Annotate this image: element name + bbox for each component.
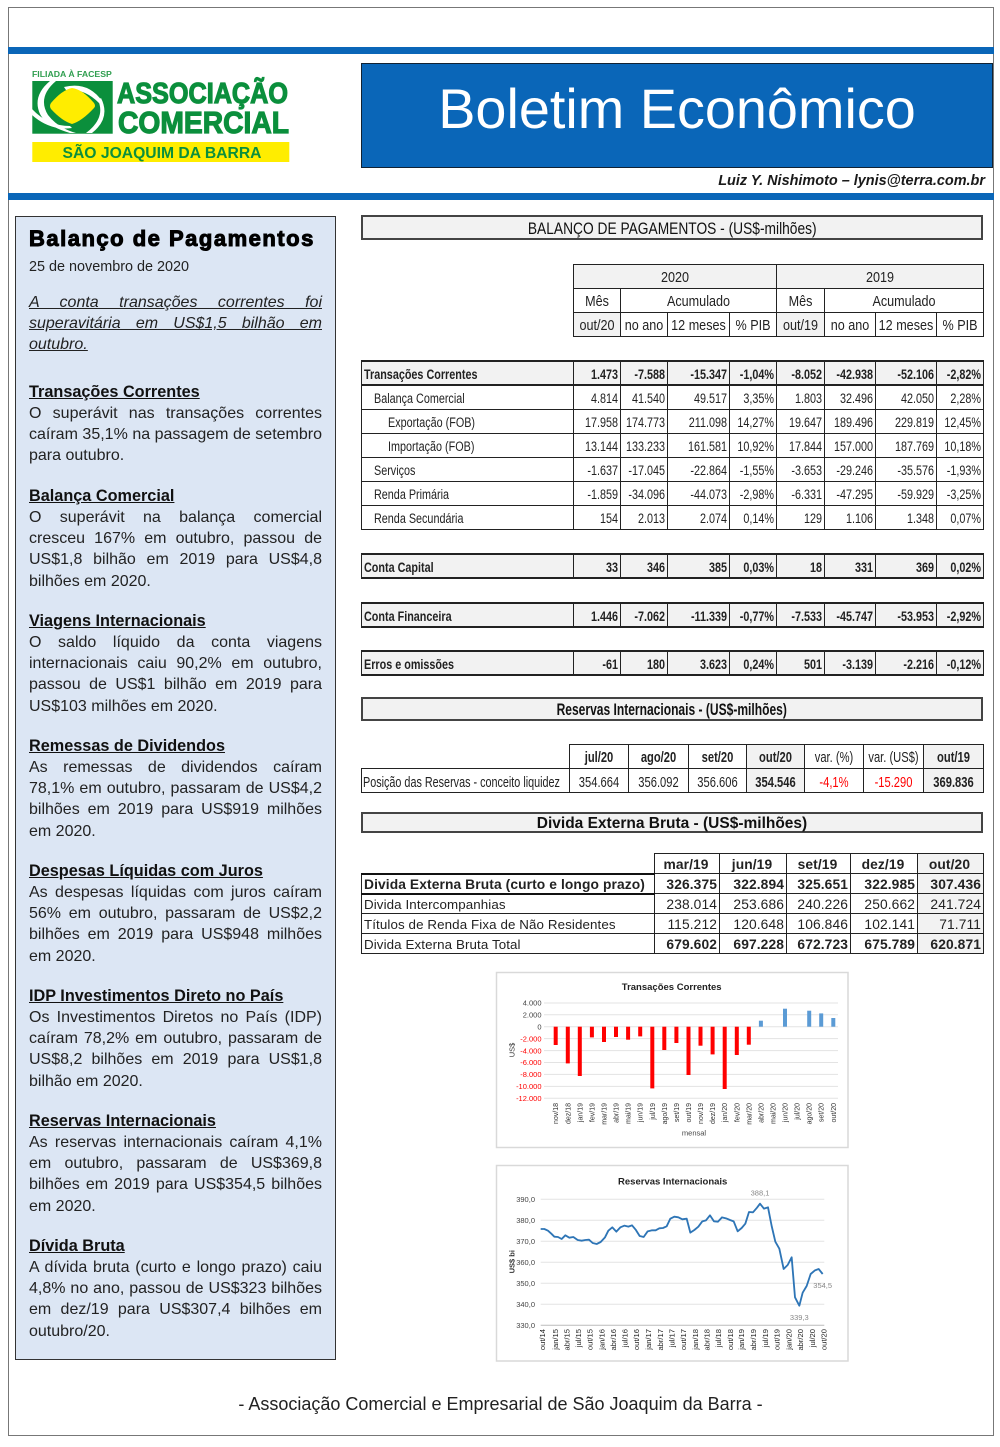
table: Posição das Reservas: 356.092 [638,774,679,790]
table: Dívida Externa Bruta [361,853,984,954]
chart: Reservas Internacionais: 380,0 [516,1216,535,1225]
section: Balança Comercial [29,486,322,590]
table row: Erros e omissões: Erros e omissões [364,657,454,672]
lead text: outubro. [29,336,88,353]
table: Dívida Externa Bruta: 307.436 [930,877,981,892]
table: Dívida Externa Bruta: 250.662 [864,897,915,912]
chart: Reservas Internacionais: 360,0 [516,1258,535,1267]
table row: Conta Financeira: -7.062 [634,609,665,624]
chart: Reservas Internacionais: 388,1 [751,1188,769,1198]
table: Transações Correntes: -42.938 [836,367,873,382]
footer: - Associação Comercial e Empresarial de São Joaquim da Barra - [238,1394,763,1414]
chart: Transações Correntes: -4.000 [520,1046,542,1055]
section: Reservas Internacionais: em 2020. [29,1198,96,1215]
table: Posição das Reservas: -15.290 [875,774,912,790]
table: Dívida Externa Bruta: mar/19 [663,857,709,872]
chart: Reservas Internacionais: 354,5 [813,1281,832,1290]
table: Transações Correntes [361,360,984,530]
chart: Transações Correntes: 2.000 [523,1010,542,1020]
table: Transações Correntes: Renda Secundária [374,510,463,526]
author line: Luiz Y. Nishimoto – lynis@terra.com.br [718,173,985,189]
table: Posição das Reservas: 356.606 [697,774,738,790]
section: Balança Comercial: O superávit na balança comercial [29,509,322,526]
table: Dívida Externa Bruta: 106.846 [797,917,848,932]
table header: 2020 and 2019 periods: 12 meses [671,317,726,334]
table: Transações Correntes: -3.653 [791,462,822,478]
chart: Transações Correntes: out/20 [831,1103,838,1122]
chart: Reservas Internacionais: out/17 [679,1329,688,1350]
table: Transações Correntes: -2,98% [740,486,774,502]
table: Transações Correntes: 133.233 [626,438,665,454]
section: Dívida Bruta: em dez/19 para US$307,4 bilhões em [29,1301,322,1318]
section: Transações Correntes: para outubro. [29,447,124,464]
table: Posição das Reservas: 354.664 [579,774,619,790]
table: Transações Correntes: -6.331 [791,486,822,502]
table: Transações Correntes: -2,82% [947,367,981,382]
section: Transações Correntes [29,382,322,464]
table: Transações Correntes: 157.000 [834,438,873,454]
table row: Erros e omissões: 180 [647,657,665,672]
table: Dívida Externa Bruta: 241.724 [930,897,981,912]
table: Transações Correntes: 32.496 [840,390,873,406]
table: Transações Correntes: 229.819 [895,414,934,430]
table header: 2020 and 2019 periods: Acumulado [667,293,730,310]
section: Reservas Internacionais [29,1112,322,1215]
table: Transações Correntes: -7.588 [634,367,665,382]
chart: Transações Correntes: ago/20 [807,1103,814,1124]
table: Transações Correntes: -1,55% [740,462,774,478]
section: Remessas de Dividendos: As remessas de dividendos caíram [29,759,322,776]
section: Transações Correntes: caíram 35,1% na passagem de setembro [29,426,322,443]
table row: Conta Financeira: -7.533 [791,609,822,624]
table: Transações Correntes: 42.050 [901,390,934,406]
table row: Conta Capital: 0,02% [950,560,981,575]
table row: Erros e omissões: 501 [804,657,822,672]
chart: Reservas Internacionais: 340,0 [516,1300,535,1309]
section: Despesas Líquidas com Juros: 56% em outubro, passaram de US$2,2 [29,905,322,922]
chart: Reservas Internacionais: jan/18 [691,1329,700,1351]
logo: Associação Comercial: FILIADA À FACESP [32,69,112,79]
date: 25 de novembro de 2020 [29,259,189,275]
chart: Transações Correntes: -10.000 [516,1082,542,1091]
table: Dívida Externa Bruta: jun/19 [732,857,772,872]
title banner: Boletim Econômico [438,77,916,140]
chart: Reservas Internacionais: abr/17 [656,1329,665,1351]
table header: 2020 and 2019 periods [573,264,984,337]
table: Transações Correntes: -17.045 [628,462,665,478]
table row: Conta Capital: 331 [855,560,873,575]
table: Posição das Reservas: set/20 [702,750,733,766]
table: Posição das Reservas: var. (%) [815,750,853,766]
table: Dívida Externa Bruta: 620.871 [930,937,981,952]
table: Transações Correntes: -52.106 [897,367,934,382]
table: Transações Correntes: Balança Comercial [374,390,465,406]
table: Transações Correntes: 2.013 [638,510,665,526]
table row: Erros e omissões: 3.623 [700,657,727,672]
table: Dívida Externa Bruta: 679.602 [666,937,717,952]
section: Viagens Internacionais: passou de US$1 bilhão em 2019 para [29,676,322,693]
table: Transações Correntes: 10,18% [944,438,981,454]
chart: Reservas Internacionais: abr/18 [702,1329,712,1351]
table: Posição das Reservas: Posição das Reservas - conceito liquidez [363,774,560,790]
chart: Transações Correntes: US$ [508,1042,516,1057]
heading: Dívida Externa Bruta table: Divida Externa Bruta - (US$-milhões) [537,815,807,832]
table: Transações Correntes: 4.814 [591,390,618,406]
table: Transações Correntes: 17.844 [789,438,822,454]
chart: Transações Correntes: abr/19 [614,1103,620,1123]
section: Balança Comercial: US$1,8 bilhão em 2019 para US$4,8 [29,551,322,568]
chart: Reservas Internacionais: US$ bi [508,1250,516,1273]
chart: Transações Correntes: mai/19 [626,1103,633,1124]
table header: 2020 and 2019 periods: 2019 [866,269,894,286]
table row: Conta Capital [361,553,984,579]
chart: Transações Correntes: mar/20 [746,1103,753,1125]
heading: Reservas Internacionais table [361,697,983,721]
section: Viagens Internacionais: Viagens Internacionais [29,612,206,630]
table: Transações Correntes: -1,04% [740,367,774,382]
table: Transações Correntes: 41.540 [632,390,665,406]
chart: Transações Correntes: 4.000 [523,999,542,1008]
table: Transações Correntes: 161.581 [688,438,727,454]
section: Reservas Internacionais: bilhões em 2019 para US$354,5 bilhões [29,1176,322,1193]
chart: Transações Correntes: jul/19 [650,1103,657,1121]
heading: Balanço de Pagamentos table: BALANÇO DE PAGAMENTOS - (US$-milhões) [528,219,816,238]
table: Transações Correntes: 0,07% [950,510,981,526]
table: Dívida Externa Bruta: 322.894 [733,877,784,892]
table row: Conta Capital: Conta Capital [364,560,434,575]
section: IDP Investimentos Direto no País: bilhão em 2020. [29,1073,143,1090]
chart: Transações Correntes: out/19 [686,1103,693,1122]
table: Transações Correntes: -22.864 [690,462,727,478]
table: Dívida Externa Bruta: 322.985 [864,877,915,892]
chart: Reservas Internacionais: out/15 [586,1329,594,1350]
section: IDP Investimentos Direto no País: caíram 78,2% em outubro, passaram de [29,1030,322,1047]
table: Transações Correntes: 19.647 [789,414,822,430]
table: Posição das Reservas [361,744,984,793]
section: Dívida Bruta: 4,8% no ano, passou de US$323 bilhões [29,1280,322,1297]
table: Posição das Reservas: -4,1% [819,774,849,790]
section: Reservas Internacionais: As reservas internacionais caíram 4,1% [29,1134,322,1151]
table: Transações Correntes: -8.052 [791,367,822,382]
table row: Conta Financeira: Conta Financeira [364,609,452,624]
table header: 2020 and 2019 periods: 2020 [661,269,689,286]
table: Dívida Externa Bruta: 102.141 [864,917,915,932]
chart: Transações Correntes: abr/20 [758,1103,765,1123]
chart: Transações Correntes: jan/20 [722,1103,729,1123]
table: Transações Correntes: Serviços [374,462,415,478]
table: Transações Correntes: 189.496 [834,414,873,430]
table: Posição das Reservas: jul/20 [585,750,613,766]
section: Transações Correntes: O superávit nas transações correntes [29,405,322,422]
table: Transações Correntes: 0,14% [743,510,774,526]
chart: Reservas Internacionais: jan/15 [551,1329,560,1351]
chart: Reservas Internacionais: out/18 [726,1329,735,1350]
section: IDP Investimentos Direto no País: US$8,2 bilhões em 2019 para US$1,8 [29,1051,322,1068]
table: Transações Correntes: 1.803 [795,390,822,406]
table header: 2020 and 2019 periods: out/19 [783,317,818,334]
table: Transações Correntes: 174.773 [626,414,665,430]
chart: Reservas Internacionais: jul/17 [668,1329,676,1348]
table: Posição das Reservas: out/20 [759,750,792,766]
section: Remessas de Dividendos: Remessas de Dividendos [29,736,225,754]
table: Transações Correntes: 14,27% [737,414,774,430]
table: Transações Correntes: 13.144 [585,438,618,454]
table row: Erros e omissões: -2.216 [903,657,934,672]
chart: Transações Correntes: nov/18 [553,1103,560,1124]
chart: Transações Correntes: -12.000 [516,1094,542,1103]
table: Posição das Reservas: out/19 [937,750,970,766]
table: Transações Correntes: 2,28% [950,390,981,406]
chart: Transações Correntes: jun/19 [638,1103,645,1123]
table: Dívida Externa Bruta: 71.711 [939,917,981,932]
section: IDP Investimentos Direto no País [29,986,322,1090]
table header: 2020 and 2019 periods: 12 meses [879,317,933,334]
chart: Reservas Internacionais: out/14 [538,1329,547,1350]
table: Dívida Externa Bruta: Divida Externa Bruta Total [364,937,521,952]
table row: Conta Capital: 33 [606,560,618,575]
chart: Reservas Internacionais: out/16 [632,1329,641,1350]
chart: Transações Correntes [496,972,848,1148]
table: Transações Correntes: 1.348 [907,510,934,526]
chart: Transações Correntes: ago/19 [662,1103,669,1124]
table: Transações Correntes: Renda Primária [374,486,449,502]
header bottom blue bar [8,193,994,200]
heading: Balanço de Pagamentos table [361,215,983,240]
title banner [361,63,993,168]
panel heading: Balanço de Pagamentos [29,226,315,251]
chart: Reservas Internacionais: jul/16 [620,1329,630,1348]
chart: Transações Correntes: mai/20 [770,1103,778,1124]
logo: Associação Comercial [32,69,290,162]
section: Dívida Bruta: outubro/20. [29,1323,110,1340]
chart: Reservas Internacionais: jul/18 [714,1329,723,1348]
section: Reservas Internacionais: em outubro, passaram de US$369,8 [29,1155,322,1172]
table: Dívida Externa Bruta: out/20 [929,857,970,872]
table row: Conta Financeira: -53.953 [897,609,934,624]
table: Dívida Externa Bruta: 120.648 [733,917,784,932]
lead text: superavitária em US$1,5 bilhão em [29,315,322,332]
table: Transações Correntes: Transações Correntes [364,367,477,382]
chart: Reservas Internacionais: abr/16 [609,1329,618,1351]
table row: Conta Financeira: 1.446 [591,609,618,624]
chart: Reservas Internacionais: jan/20 [784,1329,794,1351]
chart: Reservas Internacionais: 350,0 [516,1279,535,1288]
chart: Transações Correntes: jan/19 [577,1103,584,1123]
section: Viagens Internacionais [29,612,322,715]
table: Dívida Externa Bruta: 675.789 [864,937,915,952]
table header: 2020 and 2019 periods: Acumulado [872,293,936,310]
lead text: A conta transações correntes foi [29,294,322,310]
section: Dívida Bruta: A dívida bruta (curto e longo prazo) caiu [29,1259,322,1276]
table row: Erros e omissões: -0,12% [947,657,981,672]
table: Dívida Externa Bruta: 697.228 [733,937,784,952]
table header: 2020 and 2019 periods: % PIB [942,317,978,334]
table: Dívida Externa Bruta: Títulos de Renda Fixa de Não Residentes [364,917,616,932]
section: Dívida Bruta: Dívida Bruta [29,1236,125,1254]
chart: Reservas Internacionais: 339,3 [790,1313,809,1322]
chart: Reservas Internacionais: jul/15 [574,1329,583,1348]
section: Balança Comercial: cresceu 167% em outubro, passou de [29,530,322,547]
section: Reservas Internacionais: Reservas Internacionais [29,1112,216,1130]
chart: Reservas Internacionais [496,1166,848,1361]
lead text [28,294,322,353]
table: Transações Correntes: -1.637 [587,462,618,478]
panel: Balanço de Pagamentos text column [15,216,336,1360]
chart: Reservas Internacionais: Reservas Internacionais [618,1176,727,1188]
section: Dívida Bruta [29,1236,322,1340]
chart: Transações Correntes: 0 [537,1022,542,1031]
table: Dívida Externa Bruta: 326.375 [666,877,717,892]
section: Remessas de Dividendos: 78,1% em outubro, passaram de US$4,2 [29,780,322,797]
chart: Reservas Internacionais: abr/15 [562,1329,572,1351]
chart: Reservas Internacionais: jul/19 [761,1329,770,1348]
chart: Transações Correntes: jun/20 [782,1103,790,1123]
chart: Reservas Internacionais: abr/19 [749,1329,758,1351]
table: Dívida Externa Bruta: Divida Intercompanhias [364,897,506,912]
table row: Conta Financeira [361,602,984,628]
header top blue bar [8,47,994,54]
chart: Reservas Internacionais: 370,0 [516,1237,535,1246]
table: Transações Correntes: 12,45% [944,414,981,430]
section: Despesas Líquidas com Juros [29,862,322,965]
table: Posição das Reservas: var. (US$) [868,750,919,766]
table: Posição das Reservas: ago/20 [641,750,676,766]
table header: 2020 and 2019 periods: no ano [831,317,869,334]
chart: Reservas Internacionais: out/20 [820,1329,828,1350]
chart: Reservas Internacionais: jan/16 [598,1329,606,1351]
table row: Conta Financeira: -2,92% [947,609,981,624]
chart: Reservas Internacionais: 330,0 [516,1321,535,1330]
table header: 2020 and 2019 periods: % PIB [735,317,771,334]
section: IDP Investimentos Direto no País: IDP Investimentos Direto no País [29,986,283,1004]
table row: Conta Financeira: -0,77% [740,609,774,624]
section: Transações Correntes: Transações Correntes [29,382,200,400]
table: Transações Correntes: 154 [600,510,618,526]
section: Viagens Internacionais: internacionais caiu 90,2% em outubro, [29,655,322,672]
table row: Conta Capital: 0,03% [743,560,774,575]
heading: Dívida Externa Bruta table [361,812,983,833]
table: Transações Correntes: -15.347 [690,367,727,382]
chart: Transações Correntes: jul/20 [795,1103,802,1121]
section: Despesas Líquidas com Juros: em 2020. [29,948,96,965]
chart: Transações Correntes: mensal [682,1128,706,1138]
table: Transações Correntes: 3,35% [743,390,774,406]
section: Balança Comercial: Balança Comercial [29,486,174,504]
chart: Reservas Internacionais: abr/20 [796,1329,805,1351]
table: Transações Correntes: -34.096 [628,486,665,502]
table row: Conta Capital: 385 [709,560,727,575]
chart: Transações Correntes: fev/20 [734,1103,741,1122]
table header: 2020 and 2019 periods: no ano [625,317,663,334]
table: Transações Correntes: 187.769 [895,438,934,454]
chart: Reservas Internacionais: jan/19 [737,1329,746,1351]
table: Transações Correntes: -1,93% [947,462,981,478]
table: Dívida Externa Bruta: 325.651 [797,877,848,892]
table: Transações Correntes: -3,25% [947,486,981,502]
table: Dívida Externa Bruta: 240.226 [797,897,848,912]
table: Transações Correntes: 49.517 [694,390,727,406]
table: Transações Correntes: -59.929 [897,486,934,502]
table: Transações Correntes: -35.576 [897,462,934,478]
section: Balança Comercial: bilhões em 2020. [29,573,151,590]
chart: Transações Correntes: set/20 [819,1103,826,1122]
table row: Conta Capital: 369 [916,560,934,575]
section: Remessas de Dividendos [29,736,322,840]
table: Transações Correntes: 2.074 [700,510,727,526]
table row: Erros e omissões: 0,24% [743,657,774,672]
table: Dívida Externa Bruta: Divida Externa Bruta (curto e longo prazo) [364,877,645,892]
table header: 2020 and 2019 periods: Mês [585,293,609,310]
section: Despesas Líquidas com Juros: As despesas líquidas com juros caíram [29,884,322,901]
table: Transações Correntes: -44.073 [690,486,727,502]
table: Transações Correntes: 17.958 [585,414,618,430]
section: Despesas Líquidas com Juros: bilhões em 2019 para US$948 milhões [29,926,322,943]
table: Transações Correntes: 129 [804,510,822,526]
chart: Transações Correntes: dez/18 [565,1103,572,1124]
table: Transações Correntes: 211.098 [689,414,727,430]
chart: Reservas Internacionais: jul/20 [808,1329,817,1348]
chart: Transações Correntes: mar/19 [602,1103,608,1125]
table header: 2020 and 2019 periods: Mês [789,293,812,310]
table row: Conta Financeira: -45.747 [836,609,873,624]
table: Dívida Externa Bruta: set/19 [798,857,837,872]
table: Transações Correntes: 1.106 [846,510,873,526]
table: Transações Correntes: Exportação (FOB) [388,414,475,430]
table row: Conta Capital: 346 [647,560,665,575]
chart: Transações Correntes: -6.000 [520,1058,542,1067]
table row: Erros e omissões: -61 [602,657,618,672]
heading: Reservas Internacionais table: Reservas Internacionais - (US$-milhões) [557,701,787,719]
chart: Reservas Internacionais: jan/17 [644,1329,653,1351]
chart: Transações Correntes: -2.000 [520,1034,542,1043]
table: Dívida Externa Bruta: 672.723 [797,937,848,952]
section: Despesas Líquidas com Juros: Despesas Líquidas com Juros [29,862,263,880]
table row: Erros e omissões [361,650,984,676]
section: IDP Investimentos Direto no País: Os Investimentos Diretos no País (IDP) [29,1009,322,1026]
table: Dívida Externa Bruta: 253.686 [733,897,784,912]
chart: Transações Correntes: -8.000 [520,1070,542,1079]
section: Remessas de Dividendos: em 2020. [29,823,96,840]
table: Posição das Reservas: 354.546 [755,774,796,790]
table: Dívida Externa Bruta: 115.212 [667,917,717,932]
table: Transações Correntes: Importação (FOB) [388,438,474,454]
table: Transações Correntes: 10,92% [737,438,774,454]
section: Viagens Internacionais: O saldo líquido da conta viagens [29,634,322,651]
table: Transações Correntes: -1.859 [587,486,618,502]
logo: Associação Comercial: SÃO JOAQUIM DA BARRA [62,144,262,162]
table: Transações Correntes: -47.295 [836,486,873,502]
chart: Transações Correntes: Transações Correntes [622,982,722,993]
section: Viagens Internacionais: US$103 milhões em 2020. [29,698,218,715]
table: Transações Correntes: 1.473 [591,367,618,382]
chart: Transações Correntes: set/19 [674,1103,681,1122]
table row: Erros e omissões: -3.139 [842,657,873,672]
table: Dívida Externa Bruta: dez/19 [862,857,904,872]
table header: 2020 and 2019 periods: out/20 [579,317,615,334]
chart: Transações Correntes: nov/19 [698,1103,705,1124]
table: Posição das Reservas: 369.836 [933,774,974,790]
table row: Conta Financeira: -11.339 [691,609,727,624]
chart: Reservas Internacionais: 390,0 [516,1195,535,1204]
table: Dívida Externa Bruta: 238.014 [666,897,717,912]
section: Remessas de Dividendos: bilhões em 2019 para US$919 milhões [29,801,322,818]
chart: Transações Correntes: dez/19 [710,1103,717,1124]
table: Transações Correntes: -29.246 [836,462,873,478]
chart: Transações Correntes: fev/19 [589,1103,596,1122]
table row: Conta Capital: 18 [810,560,822,575]
chart: Reservas Internacionais: out/19 [772,1329,782,1350]
